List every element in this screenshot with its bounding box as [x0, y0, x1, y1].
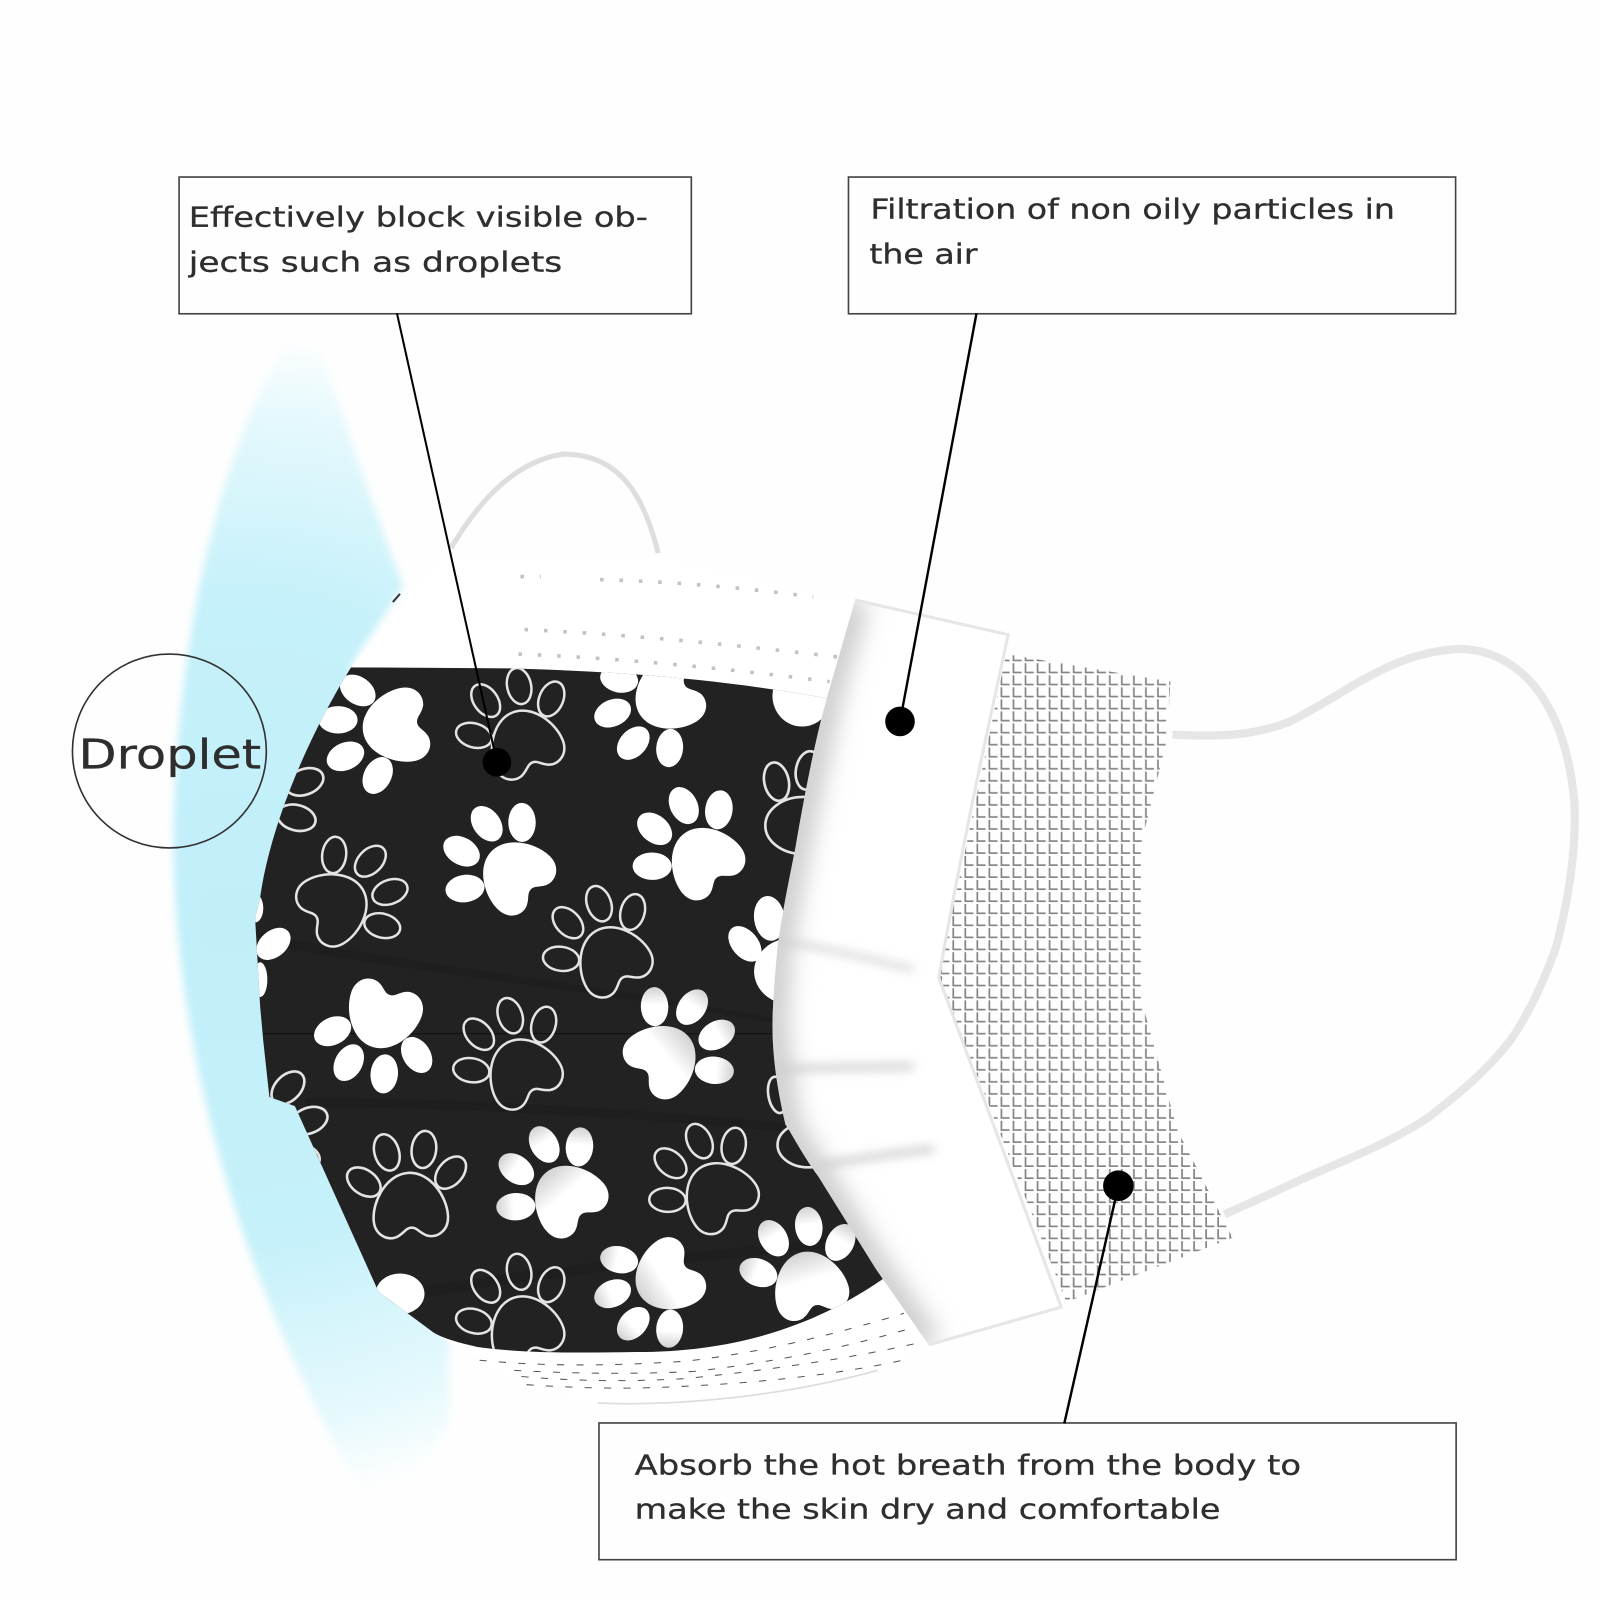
paw prints	[182, 626, 881, 1381]
droplet circle label: Droplet	[79, 730, 261, 778]
leader line and dot: filtration	[885, 313, 977, 736]
band left edge shading	[772, 600, 929, 1345]
callout box: absorb hot breath	[599, 1423, 1456, 1560]
callout box: absorb hot breath: make the skin dry and comfortable	[635, 1493, 1220, 1525]
black paw-print mask panel	[255, 667, 883, 1352]
left ear loop	[451, 454, 658, 553]
partial paws at the band edge	[247, 665, 832, 1314]
callout box: block droplets: jects such as droplets	[188, 246, 562, 278]
leader line and dot: absorb	[1064, 1170, 1134, 1423]
droplet circle label	[72, 654, 266, 848]
right ear loop	[1172, 649, 1575, 1214]
white nose-side band of the mask	[772, 600, 1061, 1345]
callout box: absorb hot breath: Absorb the hot breath from the body to	[635, 1449, 1301, 1481]
callout box: block droplets: Effectively block visible ob-	[189, 202, 648, 234]
inner mesh fabric layer	[940, 655, 1232, 1300]
leader line and dot: block droplets	[397, 313, 511, 777]
callout box: filtration: Filtration of non oily particles in	[870, 193, 1395, 225]
band fold shadows	[772, 941, 934, 1166]
droplet spray: blue crescent	[173, 342, 449, 1510]
band edge stitching	[855, 600, 1061, 1345]
upper white mask fabric with dotted stitching	[351, 555, 855, 700]
lower white mask fabric with dashed stitching	[434, 1281, 929, 1404]
callout box: filtration: the air	[869, 238, 978, 270]
callout box: block droplets	[179, 177, 691, 314]
callout box: filtration	[848, 177, 1456, 314]
